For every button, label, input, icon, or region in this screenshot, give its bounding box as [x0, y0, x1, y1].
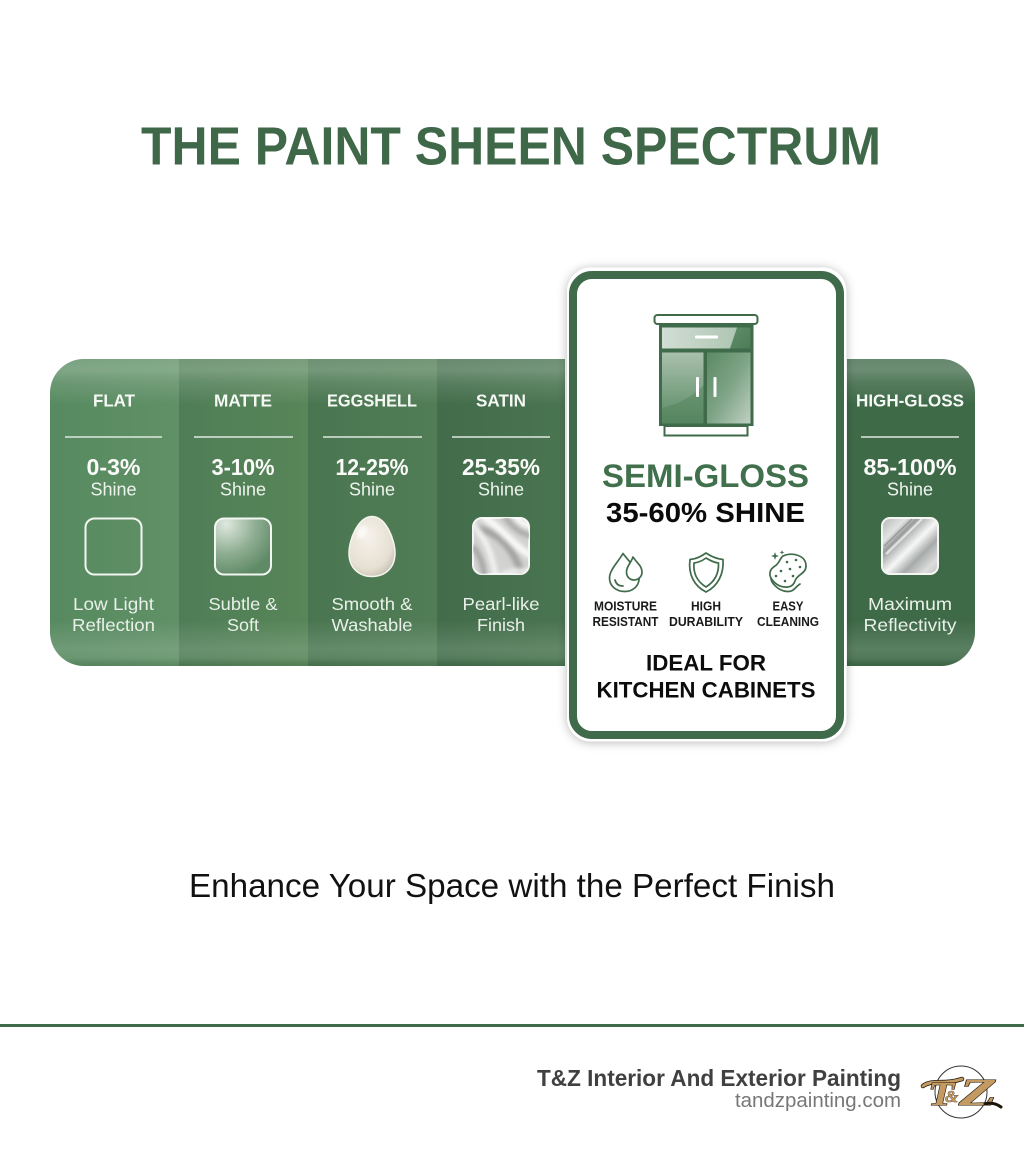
- column: flat: 0-3%: [86, 454, 140, 480]
- column: matte: MATTE: [214, 390, 272, 410]
- callout: ideal for kitchen cabinets: KITCHEN CABINETS: [596, 678, 816, 702]
- icon: T&Z logo: T: [928, 1076, 956, 1113]
- icon: kitchen cabinet: [654, 315, 758, 436]
- panel: high-gloss column: HIGH-GLOSS: [856, 390, 964, 410]
- panel: high-gloss column: Shine: [887, 480, 933, 500]
- panel: high-gloss column: [847, 359, 975, 666]
- column: matte: Subtle &: [208, 594, 278, 614]
- icon: matte swatch: [215, 518, 271, 574]
- feature: easy cleaning: CLEANING: [757, 614, 819, 629]
- column: satin: [452, 390, 550, 635]
- heading: semi-gloss: SEMI-GLOSS: [602, 458, 809, 494]
- icon: shield: [690, 553, 723, 592]
- panel: high-gloss column: Maximum: [868, 594, 952, 614]
- panel: high-gloss column: Reflectivity: [864, 615, 957, 635]
- icon: egg: [349, 516, 395, 576]
- title: THE PAINT SHEEN SPECTRUM: [141, 118, 881, 176]
- column: flat: Low Light: [73, 594, 154, 614]
- icon: water drops: [610, 554, 642, 592]
- column: matte: [194, 390, 293, 635]
- column: matte: Soft: [227, 615, 259, 635]
- icon: T&Z logo: [923, 1066, 1001, 1118]
- footer company name: T&Z Interior And Exterior Painting: [537, 1065, 901, 1091]
- column: satin: Pearl-like: [462, 594, 540, 614]
- icon: sponge: [770, 550, 806, 592]
- feature: easy cleaning: EASY: [772, 598, 804, 614]
- column: eggshell: [323, 390, 422, 635]
- feature: moisture resistant: MOISTURE: [594, 598, 657, 614]
- icon: T&Z logo: Z: [957, 1072, 997, 1114]
- feature: high durability: [669, 598, 743, 629]
- feature: high durability: DURABILITY: [669, 614, 743, 629]
- icon: high-gloss swatch: [882, 518, 938, 574]
- column: satin: Finish: [477, 615, 525, 635]
- feature: moisture resistant: [592, 598, 659, 629]
- footer website: tandzpainting.com: [735, 1090, 901, 1112]
- feature: high durability: HIGH: [691, 598, 721, 614]
- column: satin: Shine: [478, 480, 524, 500]
- column: flat: [65, 390, 162, 635]
- callout: ideal for kitchen cabinets: IDEAL FOR: [646, 650, 766, 676]
- column: flat: Reflection: [72, 615, 155, 635]
- column: eggshell: Washable: [332, 615, 412, 635]
- panel: sheen spectrum band, left columns: [50, 359, 565, 666]
- column: matte: 3-10%: [212, 454, 274, 480]
- column: eggshell: Shine: [349, 480, 395, 500]
- column: matte: Shine: [220, 480, 266, 500]
- icon: satin swatch: [472, 517, 530, 575]
- panel: semi-gloss highlight card: [567, 268, 846, 742]
- column: eggshell: 12-25%: [336, 454, 408, 480]
- feature: easy cleaning: [757, 598, 819, 629]
- tagline: Enhance Your Space with the Perfect Finish: [189, 868, 835, 905]
- column: satin: SATIN: [476, 390, 526, 410]
- column: eggshell: EGGSHELL: [327, 390, 417, 410]
- icon: T&Z logo: &: [945, 1087, 959, 1106]
- footer rule: [0, 1024, 1024, 1027]
- column: satin: 25-35%: [462, 454, 540, 480]
- panel: high-gloss column: 85-100%: [864, 454, 956, 480]
- column: flat: FLAT: [93, 390, 135, 410]
- callout: ideal for kitchen cabinets: [596, 650, 816, 702]
- icon: flat swatch: [86, 518, 142, 574]
- column: flat: Shine: [90, 480, 136, 500]
- shine value: 35-60% SHINE: [606, 497, 805, 528]
- feature: moisture resistant: RESISTANT: [592, 614, 659, 629]
- column: eggshell: Smooth &: [332, 594, 413, 614]
